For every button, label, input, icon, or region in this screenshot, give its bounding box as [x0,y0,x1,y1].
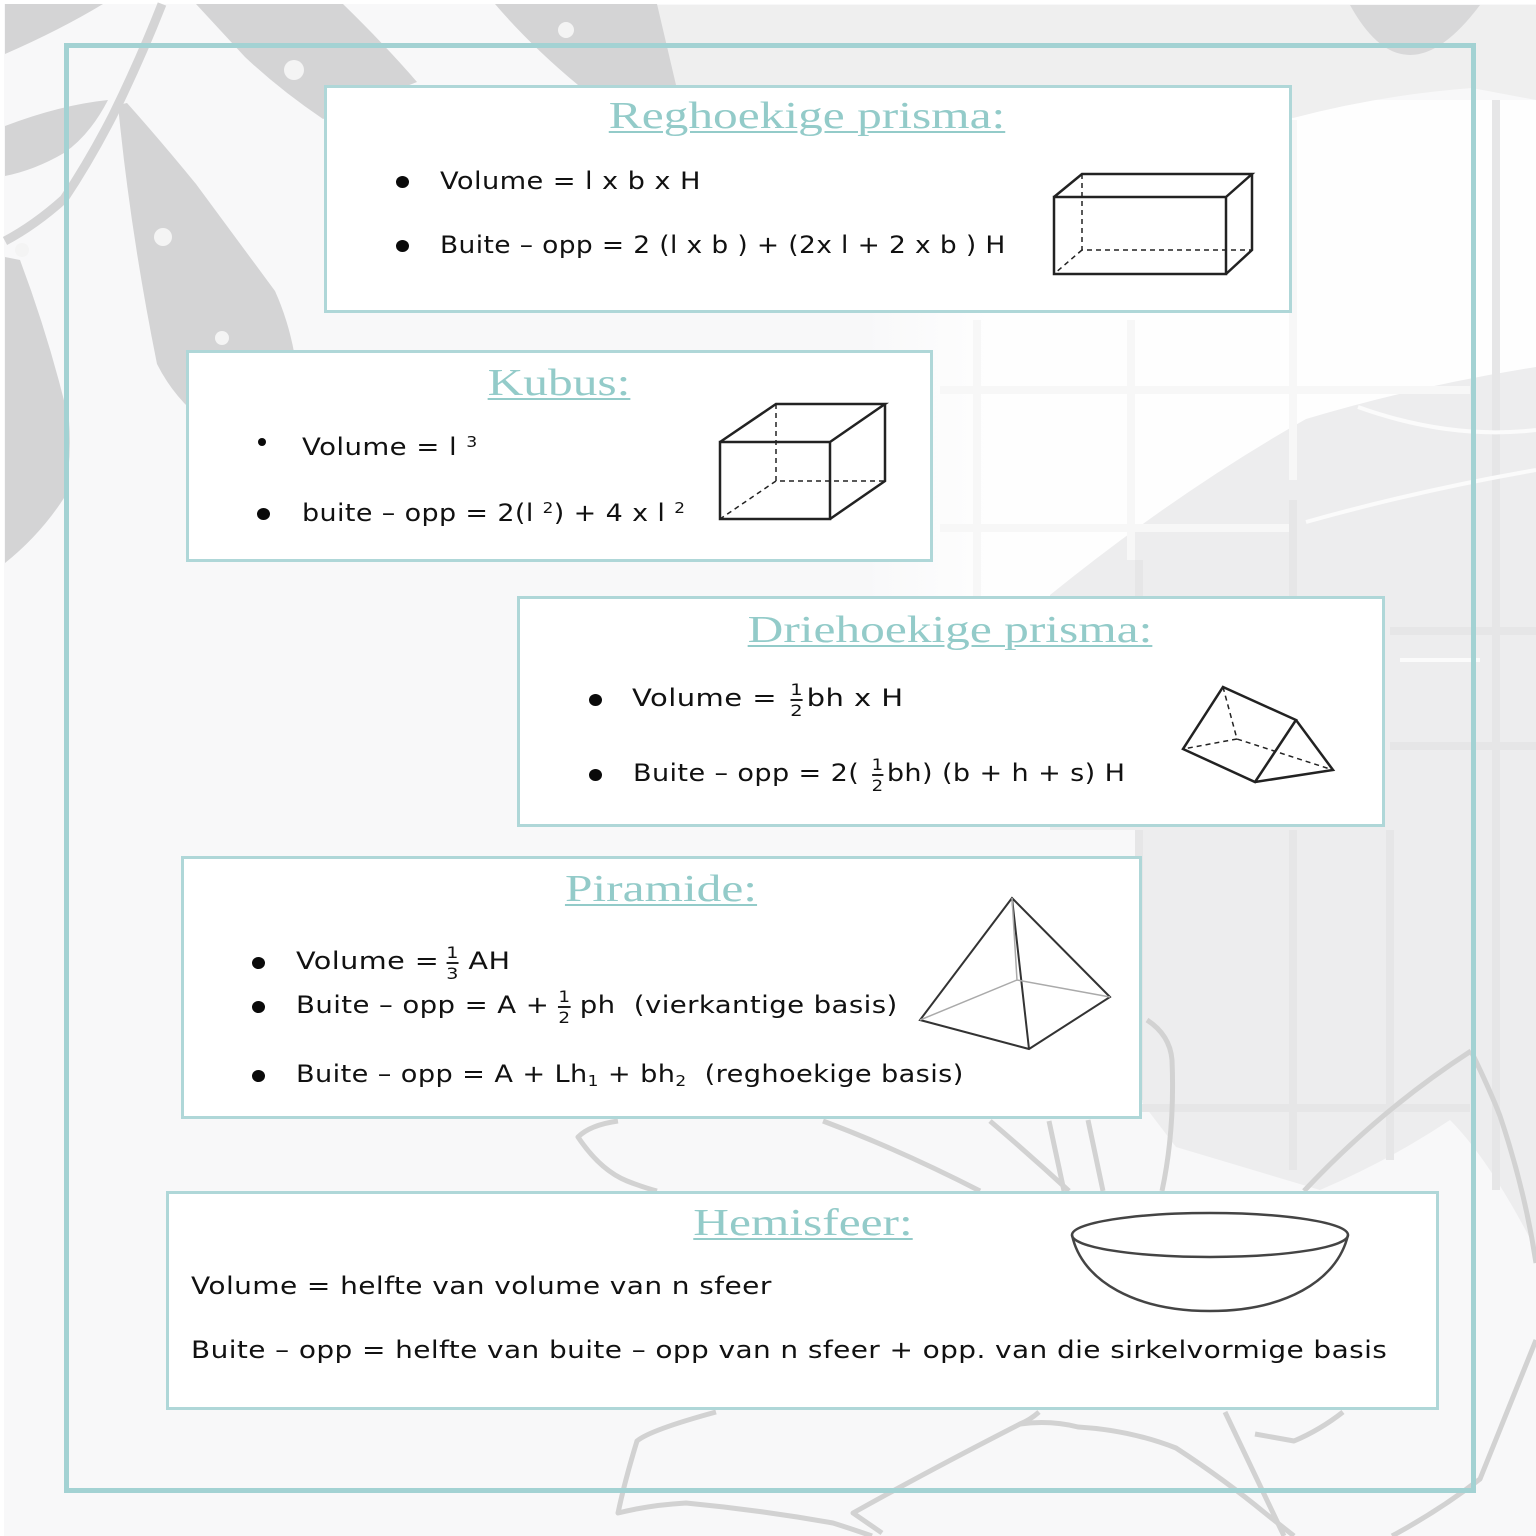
formula: surface area: Buite – opp = helfte van buite – opp van n sfeer + opp. van die sirkelvormige basis [191,1336,1387,1364]
panel: Piramide [181,856,1142,1119]
formula: volume: Volume = AH [296,947,510,975]
formula: volume: 2 [790,701,803,720]
heading: Piramide: Piramide: [565,868,757,910]
bullet 2 [589,769,602,781]
formula: surface area: Buite – opp = 2 (l x b ) + (2x l + 2 x b ) H [440,231,1006,259]
panel: Kubus [186,350,933,562]
bullet 1 [589,694,602,706]
formula: volume: Volume = l x b x H [440,167,701,195]
formula: surface area, square base: Buite – opp = A + ph (vierkantige basis) [296,991,898,1019]
bullet 2 [396,240,409,252]
bullet 1 [258,438,266,446]
panel: Hemisfeer [166,1191,1439,1410]
formula: volume: Volume = helfte van volume van n sfeer [191,1272,772,1300]
formula: volume: Volume = l 3 [302,433,478,461]
formula: surface area, square base: 1 [558,987,571,1006]
formula: volume: Volume = bh x H [632,684,903,712]
panel: Driehoekige prisma [517,596,1385,827]
panel: Reghoekige prisma [324,85,1292,313]
bullet 2 [252,1001,265,1013]
icon: rectangular prism [1052,172,1256,276]
icon: pyramid [918,896,1112,1050]
icon: triangular prism [1181,685,1336,784]
formula: surface area, square base: 2 [558,1008,571,1027]
heading: Driehoekige prisma: Driehoekige prisma: [748,609,1152,651]
heading: Hemisfeer: Hemisfeer: [693,1202,913,1244]
heading: Kubus: Kubus: [488,362,630,404]
heading: Reghoekige prisma: Reghoekige prisma: [609,95,1005,137]
bullet 1 [396,176,409,188]
icon: hemisphere [1070,1212,1350,1312]
bullet 2 [257,508,270,520]
formula: volume: 1 [790,680,803,699]
formula: volume: 3 [446,964,459,983]
bullet 1 [252,957,265,969]
formula: surface area: 1 [872,755,883,774]
formula: surface area, rectangular base: Buite – opp = A + Lh1 + bh2 (reghoekige basis) [296,1060,964,1090]
icon: cube [718,402,889,520]
bullet 3 [252,1070,265,1082]
formula: surface area: 2 [872,776,883,795]
formula: volume: 1 [446,943,459,962]
formula: surface area: buite – opp = 2(l 2) + 4 x l 2 [302,499,685,527]
formula: surface area: Buite – opp = 2( bh) (b + h + s) H [633,759,1125,787]
